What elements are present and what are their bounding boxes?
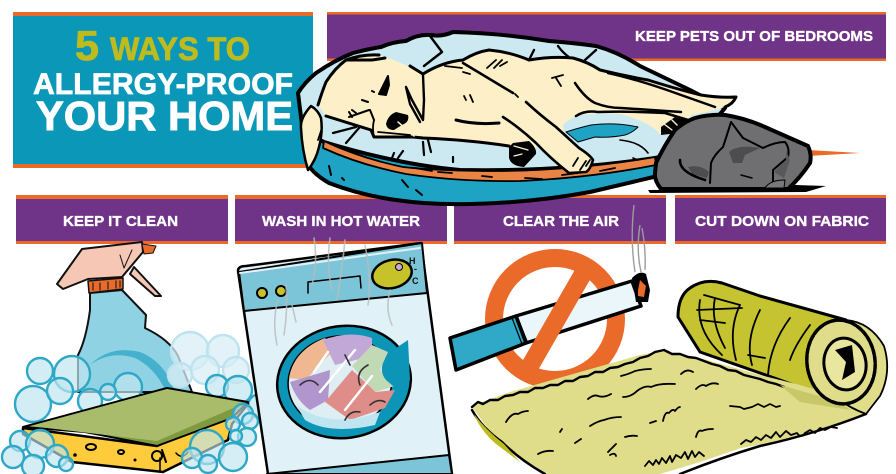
- icon: no smoking ring: [494, 258, 616, 380]
- icon: pale soap bubbles: [168, 332, 249, 387]
- icon: cigarette smoke: [632, 205, 645, 272]
- heading: 5 ways to: 5: [75, 22, 99, 69]
- panel: keep it clean: KEEP IT CLEAN: [63, 213, 178, 230]
- icon: dog bed: [298, 32, 725, 204]
- washer door: [270, 317, 418, 447]
- heading: your home: YOUR HOME: [36, 93, 293, 139]
- panel: keep pets out of bedrooms: [327, 12, 886, 61]
- panel: wash in hot water: WASH IN HOT WATER: [262, 213, 420, 230]
- panel: keep it clean: [16, 195, 228, 244]
- icon: no smoking slash: [530, 272, 584, 366]
- washer control panel: C: [412, 276, 419, 286]
- panel: cut down on fabric: [675, 195, 886, 244]
- panel: clear the air: [454, 195, 666, 244]
- icon: sleeping dog: [301, 50, 736, 173]
- washer control panel: H: [409, 256, 416, 266]
- panel: wash in hot water: [235, 195, 447, 244]
- washer control panel: [257, 256, 419, 298]
- icon: washing machine: [238, 243, 452, 474]
- icon: sponge: [23, 388, 248, 472]
- icon: blue soap bubbles: [15, 356, 276, 422]
- icon: steam: [275, 238, 392, 345]
- icon: carpet roll: [472, 281, 887, 474]
- heading: allergy-proof: ALLERGY-PROOF: [33, 68, 293, 101]
- panel: title: [13, 12, 313, 168]
- roll end: [801, 316, 887, 414]
- icon: orange streak: [808, 150, 860, 156]
- carpet pile marks: [506, 369, 837, 466]
- panel: cut down on fabric: CUT DOWN ON FABRIC: [695, 213, 869, 230]
- heading: 5 ways to: WAYS TO: [110, 31, 250, 67]
- icon: spray bottle: [57, 242, 192, 392]
- icon: foreground bubbles: [2, 404, 258, 474]
- panel: keep pets out of bedrooms: KEEP PETS OUT OF BEDROOMS: [635, 28, 873, 45]
- icon: cigarette: [450, 273, 650, 370]
- heading: 5 ways to: [75, 22, 250, 69]
- panel: clear the air: CLEAR THE AIR: [503, 213, 619, 230]
- washer control panel: -: [414, 264, 417, 274]
- icon: sleeping cat: [648, 115, 826, 193]
